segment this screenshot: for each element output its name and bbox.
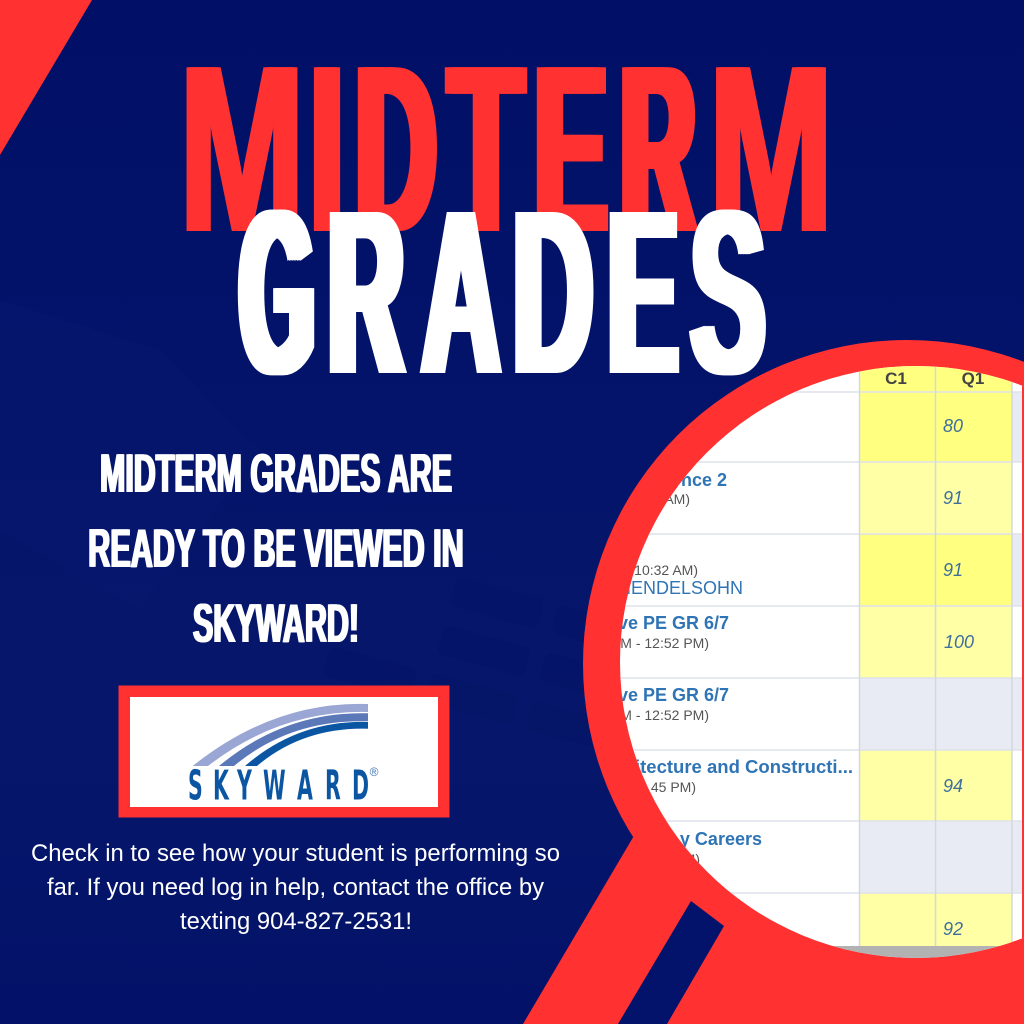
subheading: READY TO BE VIEWED IN (88, 517, 463, 579)
title: midterm (178, 16, 833, 282)
lens content: gradebook table: Q1 (962, 369, 984, 388)
lens content: gradebook table: MENDELSOHN (616, 578, 743, 598)
logo wordmark: SKYWARD (188, 762, 369, 810)
title: grades (238, 161, 766, 423)
body text: far. If you need log in help, contact the office by (47, 874, 545, 901)
title: midterm: E (535, 16, 607, 282)
lens content: gradebook table: y Careers (680, 829, 762, 849)
lens content: gradebook table: 94 (943, 776, 963, 796)
lens content: gradebook table: 92 (943, 919, 963, 939)
lens content: gradebook table: 91 (943, 488, 963, 508)
title: grades: G (240, 161, 313, 423)
title: grades: E (608, 161, 677, 423)
lens content: gradebook table: 80 (943, 416, 963, 436)
title: grades: A (422, 161, 500, 423)
lens content: gradebook table: 10:32 AM) (634, 562, 698, 578)
lens content: gradebook table: AM) (664, 491, 690, 507)
title: midterm: T (448, 16, 524, 282)
title: midterm: M (709, 16, 833, 282)
lens content: gradebook table: M - 12:52 PM) (620, 707, 709, 723)
lens content: gradebook table: 45 PM) (651, 779, 696, 795)
lens content: gradebook table: 100 (944, 632, 974, 652)
logo arcs (193, 704, 368, 766)
magnifying glass (523, 340, 1024, 1024)
title: grades: S (691, 161, 765, 423)
title: grades: R (328, 161, 403, 423)
title: grades: D (513, 161, 593, 423)
corner triangle (0, 0, 92, 155)
lens content: gradebook table (600, 360, 1024, 966)
handle (523, 780, 1024, 1024)
lens content: gradebook table: ve PE GR 6/7 (618, 613, 729, 633)
subheading: SKYWARD! (192, 592, 359, 654)
lens content: gradebook table: ve PE GR 6/7 (618, 685, 729, 705)
body text: Check in to see how your student is performing so (31, 840, 560, 867)
lens content: gradebook table: C1 (885, 369, 907, 388)
body text: texting 904-827-2531! (180, 908, 412, 935)
title: midterm: D (355, 16, 436, 282)
lens content: gradebook table: nce 2 (681, 470, 727, 490)
subheading (88, 442, 463, 654)
lens ring (583, 340, 1024, 988)
title: midterm: I (307, 16, 347, 282)
title: midterm: M (178, 16, 305, 282)
handle slot (618, 901, 724, 1024)
lens content: gradebook table: itecture and Constructi... (635, 757, 853, 777)
lens content: gradebook table: M - 12:52 PM) (620, 635, 709, 651)
lens content: gradebook table: 91 (943, 560, 963, 580)
title: midterm: R (621, 16, 695, 282)
registered mark: ® (370, 765, 379, 779)
subheading: MIDTERM GRADES ARE (99, 442, 452, 504)
lens content: gradebook table: M) (684, 851, 700, 867)
